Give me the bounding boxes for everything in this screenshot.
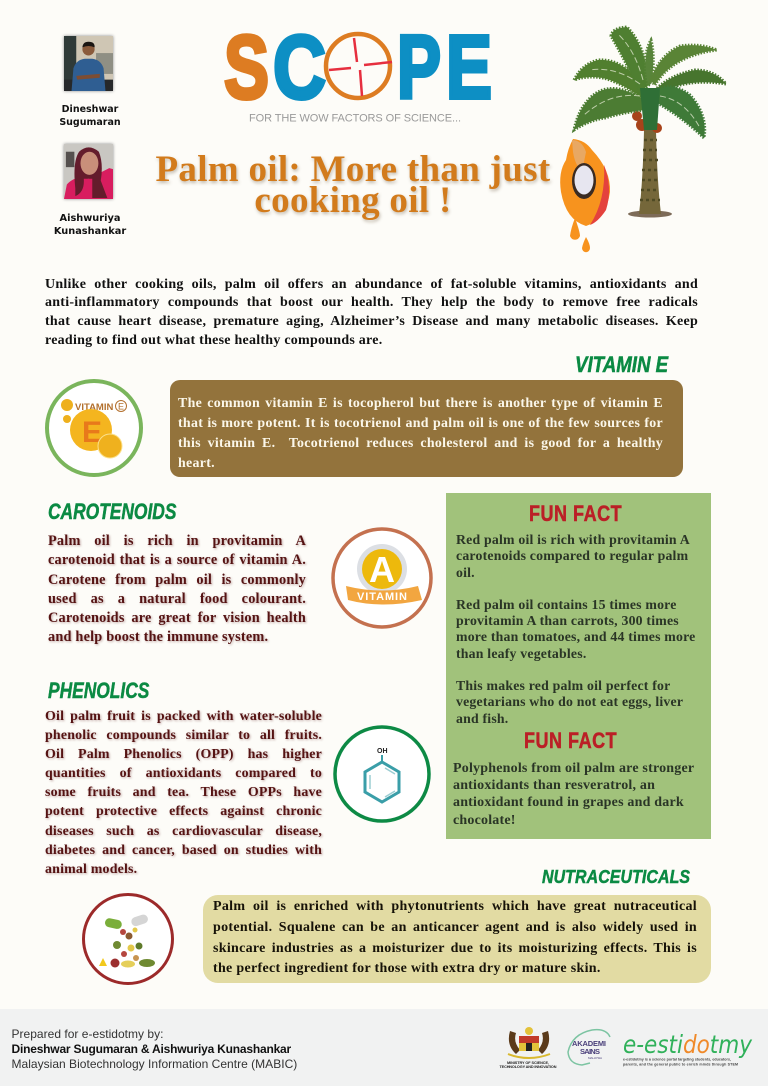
- logo: ministry crest: [500, 1027, 557, 1069]
- author photo: Aishwuriya Kunashankar: [64, 144, 113, 199]
- vitamin E paragraph: this vitamin E. Tocotrienol reduces cholesterol and is good for a healthy: [178, 436, 663, 451]
- logo: e-estidotmy: e-estidotmy: [623, 1030, 753, 1059]
- fun fact text: red palm oil: and fish.: [456, 711, 508, 726]
- vitamin E paragraph: that is more potent. It is tocotrienol and palm oil is one of the few sources for: [178, 416, 663, 431]
- nutraceuticals paragraph: potential. Squalene can be an anticancer agent and is also widely used in: [213, 920, 697, 935]
- heading: fun fact 2: FUN FACT: [524, 728, 617, 753]
- heading: phenolics: PHENOLICS: [48, 678, 149, 703]
- vitamin E paragraph: The common vitamin E is tocopherol but there is another type of vitamin E: [178, 396, 663, 411]
- icon: vitamin A badge: VITAMIN: [357, 591, 407, 603]
- author name: Dineshwar Sugumaran: [59, 104, 121, 128]
- intro paragraph: [45, 276, 698, 348]
- nutraceuticals paragraph: Palm oil is enriched with phytonutrients which have great nutraceutical: [213, 899, 697, 914]
- phenolics paragraph: [45, 709, 324, 877]
- fun fact text: polyphenols: Polyphenols from oil palm are stronger: [453, 760, 694, 776]
- phenolics paragraph: phenolic compounds similar to all fruits.: [45, 728, 322, 743]
- footer credits: [12, 1027, 297, 1071]
- icon: phenol molecule: OH: [377, 748, 388, 755]
- fun fact text: polyphenols: antioxidant found in grapes and dark: [453, 795, 684, 810]
- footer credits: Dineshwar Sugumaran & Aishwuriya Kunashankar: [12, 1042, 291, 1056]
- intro paragraph: Unlike other cooking oils, palm oil offers an abundance of fat-soluble vitamins, antioxidants and: [45, 276, 698, 292]
- fun fact text: red palm oil: [456, 532, 696, 726]
- icon: phenol molecule: [333, 725, 431, 823]
- intro paragraph: reading to find out what these healthy compounds are.: [45, 333, 382, 348]
- logo: Akademi Sains Malaysia: AKADEMI: [572, 1039, 606, 1048]
- phenolics paragraph: diabetes and cancer, based on studies with: [45, 843, 322, 858]
- vitamin E paragraph: heart.: [178, 456, 215, 471]
- carotenoids paragraph: Carotenoids are great for vision health: [48, 610, 306, 626]
- heading: vitamin E: VITAMIN E: [575, 352, 668, 377]
- intro paragraph: that cause heart disease, premature aging, Alzheimer’s Disease and many metabolic diseases. Keep: [45, 314, 698, 329]
- author photo: Dineshwar Sugumaran: [64, 36, 113, 91]
- footer band: [0, 1009, 768, 1086]
- author name: Dineshwar Sugumaran: Dineshwar: [62, 104, 118, 115]
- phenolics paragraph: quantities of antioxidants compared to: [45, 766, 322, 781]
- icon: vitamin E capsule: E: [118, 402, 124, 412]
- carotenoids paragraph: used as a natural food colourant.: [48, 591, 306, 607]
- icon: vitamin E capsule: E: [82, 416, 102, 449]
- heading: fun fact 1: FUN FACT: [529, 501, 622, 526]
- fun fact text: red palm oil: more than tomatoes, and 44 times more: [456, 629, 696, 644]
- fun fact text: red palm oil: than leafy vegetables.: [456, 646, 586, 661]
- title: Palm oil: More than just: [156, 149, 550, 190]
- logo: Akademi Sains Malaysia: SAINS: [580, 1047, 600, 1056]
- footer credits: Malaysian Biotechnology Information Centre (MABIC): [12, 1057, 297, 1071]
- logo: ministry crest: TECHNOLOGY AND INNOVATION: [500, 1065, 557, 1069]
- phenolics paragraph: animal models.: [45, 862, 137, 877]
- nutraceuticals paragraph: skincare industries as a moisturizer due to its moisturizing effects. This is: [213, 941, 697, 956]
- footer credits: Prepared for e-estidotmy by:: [12, 1027, 163, 1041]
- nutraceuticals paragraph: [213, 899, 697, 976]
- carotenoids paragraph: carotenoid that is a source of vitamin A.: [48, 552, 306, 568]
- illustration: oil palm tree: [572, 26, 726, 218]
- phenolics paragraph: diseases such as cardiovascular disease,: [45, 824, 322, 839]
- icon: vitamin E capsule: VITAMIN: [75, 402, 113, 413]
- heading: nutraceuticals: NUTRACEUTICALS: [542, 867, 690, 887]
- logo: SCOPE: [224, 25, 492, 124]
- nutraceuticals paragraph: the perfect ingredient for those with extra dry or mature skin.: [213, 961, 601, 976]
- fun fact text: red palm oil: vegetarians who do not eat eggs, liver: [456, 694, 683, 709]
- author name: Aishwuriya Kunashankar: Aishwuriya: [60, 213, 120, 224]
- phenolics paragraph: potent protective effects against chronic: [45, 804, 322, 819]
- vitamin E paragraph: [178, 396, 663, 471]
- fun fact text: polyphenols: antioxidants than resveratrol, an: [453, 778, 655, 793]
- title: cooking oil !: [254, 180, 452, 221]
- panel: fun facts: [446, 493, 711, 839]
- icon: vitamin E capsule: [45, 379, 143, 477]
- carotenoids paragraph: Carotene from palm oil is commonly: [48, 572, 306, 588]
- fun fact text: red palm oil: carotenoids compared to regular palm: [456, 548, 688, 563]
- fun fact text: red palm oil: Red palm oil is rich with provitamin A: [456, 532, 690, 547]
- logo: e-estidotmy: parents, and the general public to enrich minds through STEM: [623, 1062, 738, 1066]
- carotenoids paragraph: Palm oil is rich in provitamin A: [48, 533, 306, 549]
- phenolics paragraph: Oil palm fruit is packed with water-soluble: [45, 709, 322, 724]
- fun fact text: red palm oil: oil.: [456, 565, 475, 580]
- intro paragraph: anti-inflammatory compounds that boost our health. They help the body to remove free radicals: [45, 295, 698, 310]
- illustration: palm fruit with oil drops: [560, 139, 610, 252]
- fun fact text: red palm oil: provitamin A than carrots, 300 times: [456, 613, 679, 628]
- title: [156, 149, 552, 224]
- phenolics paragraph: some fruits and tea. These OPPs have: [45, 785, 322, 800]
- panel: vitamin E text: [170, 380, 683, 477]
- author name: Dineshwar Sugumaran: Sugumaran: [59, 116, 121, 128]
- fun fact text: polyphenols: chocolate!: [453, 813, 516, 828]
- icon: vitamin A badge: [331, 527, 433, 629]
- carotenoids paragraph: [48, 533, 308, 646]
- carotenoids paragraph: and help boost the immune system.: [48, 629, 268, 645]
- phenolics paragraph: Oil Palm Phenolics (OPP) has higher: [45, 747, 322, 762]
- fun fact text: polyphenols: [453, 760, 694, 828]
- author name: Aishwuriya Kunashankar: [54, 213, 126, 237]
- icon: vitamin A badge: A: [369, 549, 395, 590]
- logo: ministry crest: MINISTRY OF SCIENCE,: [507, 1061, 549, 1065]
- logo: e-estidotmy: e-estidotmy is a science portal targeting students, educators,: [623, 1058, 731, 1062]
- author name: Aishwuriya Kunashankar: Kunashankar: [54, 226, 126, 237]
- heading: carotenoids: CAROTENOIDS: [48, 499, 176, 524]
- fun fact text: red palm oil: Red palm oil contains 15 times more: [456, 597, 677, 612]
- logo: Akademi Sains Malaysia: MALAYSIA: [588, 1056, 602, 1060]
- icon: capsules and food: [82, 893, 174, 985]
- logo: Akademi Sains Malaysia: [567, 1028, 611, 1066]
- panel: nutraceuticals text: [203, 895, 711, 983]
- logo: SCOPE: FOR THE WOW FACTORS OF SCIENCE...: [249, 112, 461, 124]
- fun fact text: red palm oil: This makes red palm oil perfect for: [456, 678, 670, 693]
